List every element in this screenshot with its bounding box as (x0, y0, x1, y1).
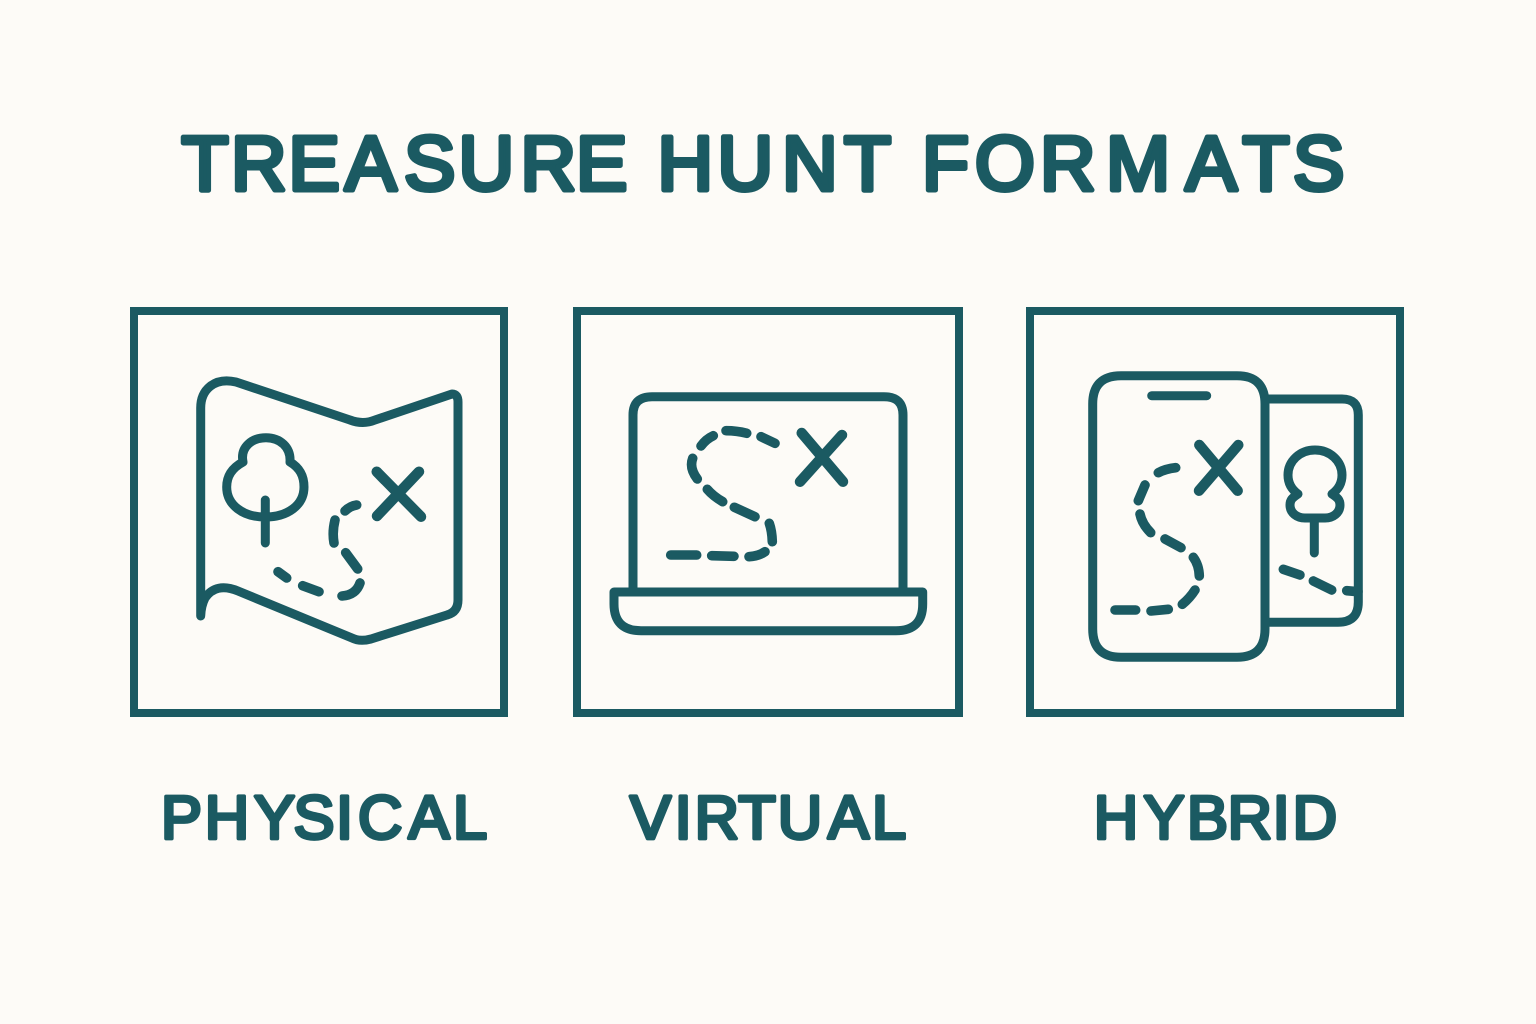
panel: virtual (577, 311, 959, 713)
panel: hybrid (1030, 311, 1400, 713)
panel: physical (134, 311, 504, 713)
title: TREASURE HUNT FORMATS (182, 121, 1344, 207)
icon: tree (1288, 450, 1342, 553)
label: physical: PHYSICAL (161, 784, 487, 853)
label: hybrid: HYBRID (1094, 784, 1337, 853)
icon: tree (227, 438, 304, 543)
icon: X mark (800, 433, 843, 482)
icon: X mark (1199, 445, 1238, 491)
icon: X mark (377, 472, 421, 517)
icon: folded map (201, 381, 458, 640)
icon: back map card (1268, 399, 1358, 622)
label: virtual: VIRTUAL (630, 784, 906, 853)
icon: phone (1093, 376, 1265, 657)
icon: dashed path (278, 505, 360, 596)
icon: laptop (614, 397, 923, 631)
icon: small dashed path (1283, 569, 1358, 592)
icon: dashed path (671, 431, 775, 557)
icon: dashed path (1115, 468, 1199, 611)
